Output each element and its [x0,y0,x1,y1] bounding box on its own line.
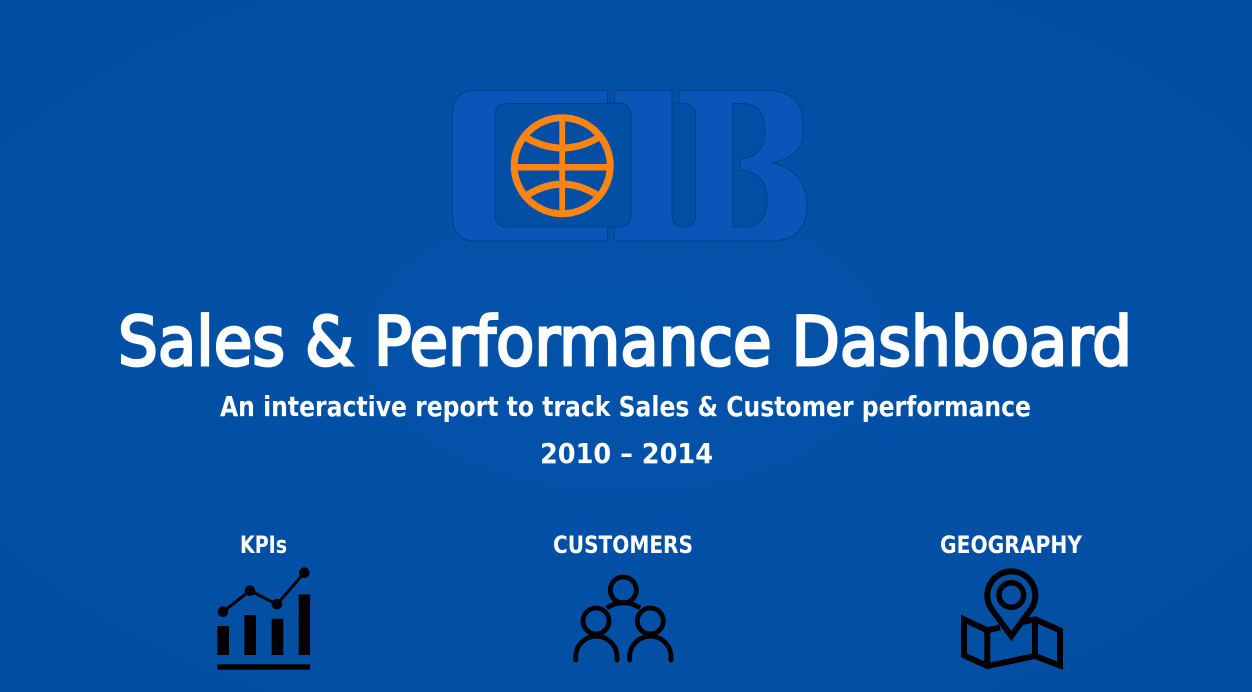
heading: KPIs: KPIs [240,531,287,559]
section: geography [940,531,1083,666]
logo counter of B [733,104,767,227]
icon: group of people [576,577,671,660]
logo: CIB [452,90,807,241]
logo letters I and B [614,90,807,241]
icon: map with pin [964,571,1060,666]
date range: 2010 – 2014 [540,437,713,470]
title: Sales & Performance Dashboard [118,303,1132,382]
section: KPIs [217,531,310,670]
icon: orange globe [514,118,610,214]
logo inner panel [495,104,631,227]
subtitle: An interactive report to track Sales & Customer performance [220,390,1031,423]
icon: bar and line chart [217,567,310,670]
heading: geography: GEOGRAPHY [940,531,1083,559]
logo slot between I and B [672,103,696,227]
section: customers [553,531,693,660]
heading: customers: CUSTOMERS [553,531,693,559]
logo letter C [452,90,631,241]
